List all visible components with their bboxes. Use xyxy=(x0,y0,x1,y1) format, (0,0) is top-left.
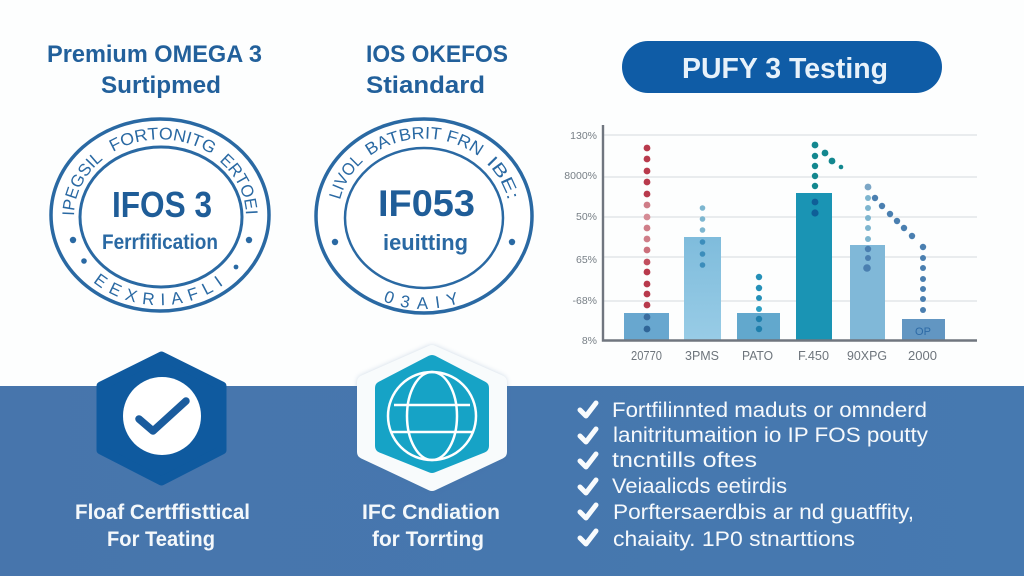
checklist xyxy=(580,399,929,551)
x axis labels xyxy=(631,349,937,363)
y axis labels: 130% xyxy=(570,130,597,142)
icon: check hexagon xyxy=(101,356,222,481)
heading: ios okefos standard: IOS OKEFOS xyxy=(366,41,508,68)
seal: IFOS 3 certification: FORTONITG xyxy=(108,128,216,152)
seal: IF053 testing: ieuitting xyxy=(383,230,468,255)
y axis labels: -68% xyxy=(572,295,597,307)
checklist: Porftersaerdbis ar nd guatffity, xyxy=(613,501,914,524)
y axis labels: 50% xyxy=(576,211,597,223)
y axis labels: 8000% xyxy=(564,170,597,182)
x axis labels: 90XPG xyxy=(847,349,887,363)
caption: IFC: for Torrting xyxy=(372,528,484,551)
seal: IF053 testing: IF053 xyxy=(378,183,475,224)
pill heading: PUFY 3 Testing xyxy=(622,41,942,93)
heading: ios okefos standard: Stiandard xyxy=(366,72,485,99)
pill heading: PUFY 3 Testing: PUFY 3 Testing xyxy=(682,53,888,85)
y axis labels: 8% xyxy=(582,335,597,347)
seal: IF053 testing xyxy=(314,117,534,315)
seal: IF053 testing: IBE: xyxy=(488,156,517,198)
seal: IF053 testing: BATBRIT FRN xyxy=(364,127,484,156)
seal: IF053 testing: 03AIY xyxy=(384,291,456,309)
seal: IFOS 3 certification: IFOS 3 xyxy=(112,184,212,225)
checklist: lanitritumaition io IP FOS poutty xyxy=(613,424,929,447)
x axis labels: F.450 xyxy=(798,349,829,363)
caption: IFC: IFC Cndiation xyxy=(362,501,500,524)
seal: IFOS 3 certification: IPEGSIL xyxy=(62,154,103,214)
checklist: Veiaalicds eetirdis xyxy=(612,475,787,498)
caption: certification: Floaf Certffisttical xyxy=(75,501,250,524)
blue bottom band xyxy=(0,386,1024,576)
x axis labels: PATO xyxy=(742,349,773,363)
heading: premium omega 3: Premium OMEGA 3 xyxy=(47,41,262,68)
checklist: Fortfilinnted maduts or omnderd xyxy=(612,399,927,422)
seal: IF053 testing: LIVOL xyxy=(329,157,363,199)
caption: IFC xyxy=(362,501,500,551)
y axis labels: 65% xyxy=(576,254,597,266)
dot series: teal xyxy=(811,142,843,217)
seal: IFOS 3 certification xyxy=(49,117,271,313)
x axis labels: 3PMS xyxy=(685,349,719,363)
heading: premium omega 3: Surtipmed xyxy=(101,72,221,99)
caption: certification: For Teating xyxy=(107,528,215,551)
checklist: tncntills oftes xyxy=(612,449,757,472)
y axis labels xyxy=(564,130,597,347)
caption: certification xyxy=(75,501,250,551)
seal: IFOS 3 certification: Ferrfification xyxy=(102,231,218,254)
icon: globe hexagon xyxy=(364,352,500,484)
axes xyxy=(603,125,977,340)
dot series: slate blue xyxy=(863,184,926,313)
bar chart xyxy=(564,125,977,363)
seal: IFOS 3 certification: EEXRIAFLI xyxy=(94,273,222,306)
bar tag: OP xyxy=(915,326,931,338)
bars xyxy=(624,193,945,340)
dot series: blue xyxy=(700,205,762,332)
heading: premium omega 3 xyxy=(47,41,262,99)
heading: ios okefos standard xyxy=(366,41,508,99)
x axis labels: 20770 xyxy=(631,349,662,363)
checklist: chaiaity. 1P0 stnarttions xyxy=(613,528,855,551)
x axis labels: 2000 xyxy=(908,349,937,363)
seal: IFOS 3 certification: ERTOEI xyxy=(220,153,258,214)
dot series: red xyxy=(644,145,650,332)
